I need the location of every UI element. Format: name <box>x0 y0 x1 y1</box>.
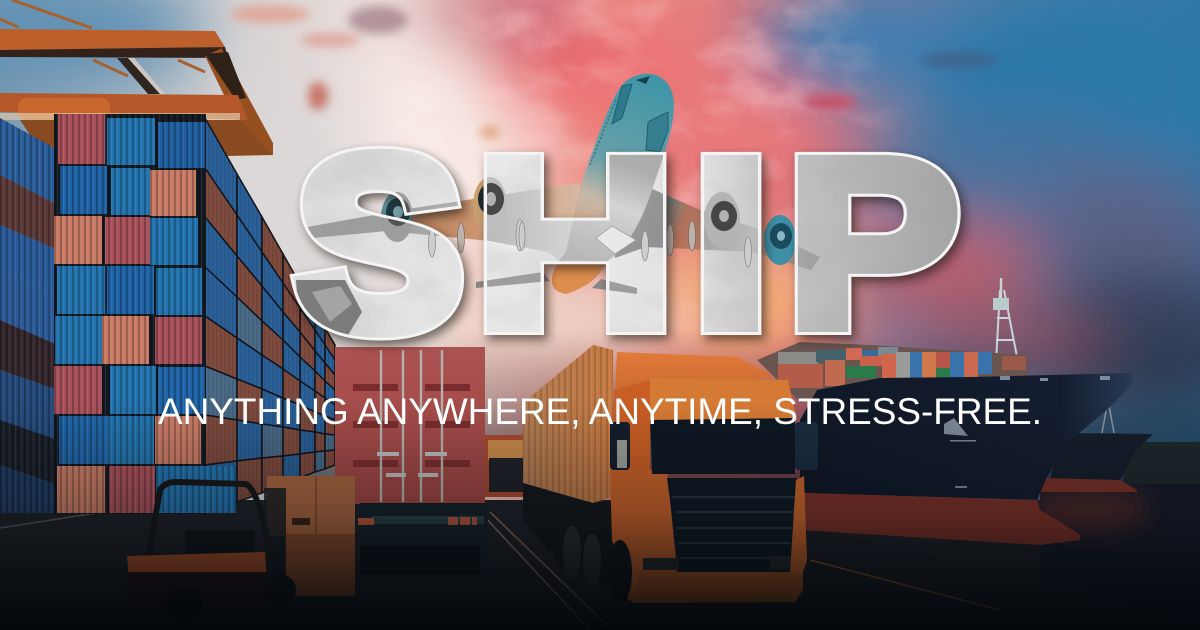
white letter outline: S <box>296 108 462 379</box>
front wheel <box>608 540 632 604</box>
windshield <box>650 418 795 474</box>
white letter outline: P <box>787 109 960 377</box>
deck containers <box>757 342 1027 402</box>
container stack: front faces <box>54 114 236 514</box>
hull markings <box>944 376 1110 488</box>
forklift body <box>127 552 267 592</box>
container stack: side wall in perspective <box>205 118 335 514</box>
ship: background vessel <box>1040 400 1200 492</box>
airplane in colour <box>307 74 820 294</box>
roof spoiler <box>615 352 775 395</box>
tagline: ANYTHING ANYWHERE, ANYTIME, STRESS-FREE. <box>158 391 1042 432</box>
orange truck: cab <box>608 352 818 604</box>
white letter outline <box>296 108 960 379</box>
title shadow: S <box>300 113 466 384</box>
red shipping container truck <box>335 347 488 575</box>
left mirror <box>610 422 630 470</box>
forklift cage <box>148 482 272 560</box>
quay edge <box>800 525 1200 630</box>
far truck <box>485 435 523 497</box>
mast <box>993 278 1018 362</box>
sky background <box>0 0 1200 500</box>
road lines <box>0 505 1000 630</box>
headlights <box>643 558 679 570</box>
crane gantry <box>0 0 273 158</box>
ground <box>0 483 1200 630</box>
bottom fade overlay <box>0 400 1200 630</box>
grille <box>667 478 800 573</box>
grayscale fill seen through letters <box>293 148 958 338</box>
hull <box>800 373 1133 500</box>
red waterline <box>800 493 1080 545</box>
orange truck: trailer <box>523 345 613 522</box>
door side <box>610 470 680 603</box>
title shadow: I <box>696 114 774 382</box>
white letter outline: H <box>476 109 675 377</box>
title shadow <box>300 113 964 384</box>
title shadow: P <box>791 114 964 382</box>
cloud texture <box>464 0 894 344</box>
title: SHIP cut-out lettering <box>289 143 971 352</box>
container stack: far left block <box>0 118 58 513</box>
chassis <box>360 503 488 563</box>
ship: main container vessel <box>757 278 1133 545</box>
bumper <box>632 572 803 603</box>
forklift and cardboard boxes <box>127 476 355 623</box>
white letter outline: I <box>692 109 770 377</box>
trailer chassis <box>523 483 650 590</box>
title shadow: H <box>480 114 679 382</box>
right mirror <box>795 422 818 470</box>
